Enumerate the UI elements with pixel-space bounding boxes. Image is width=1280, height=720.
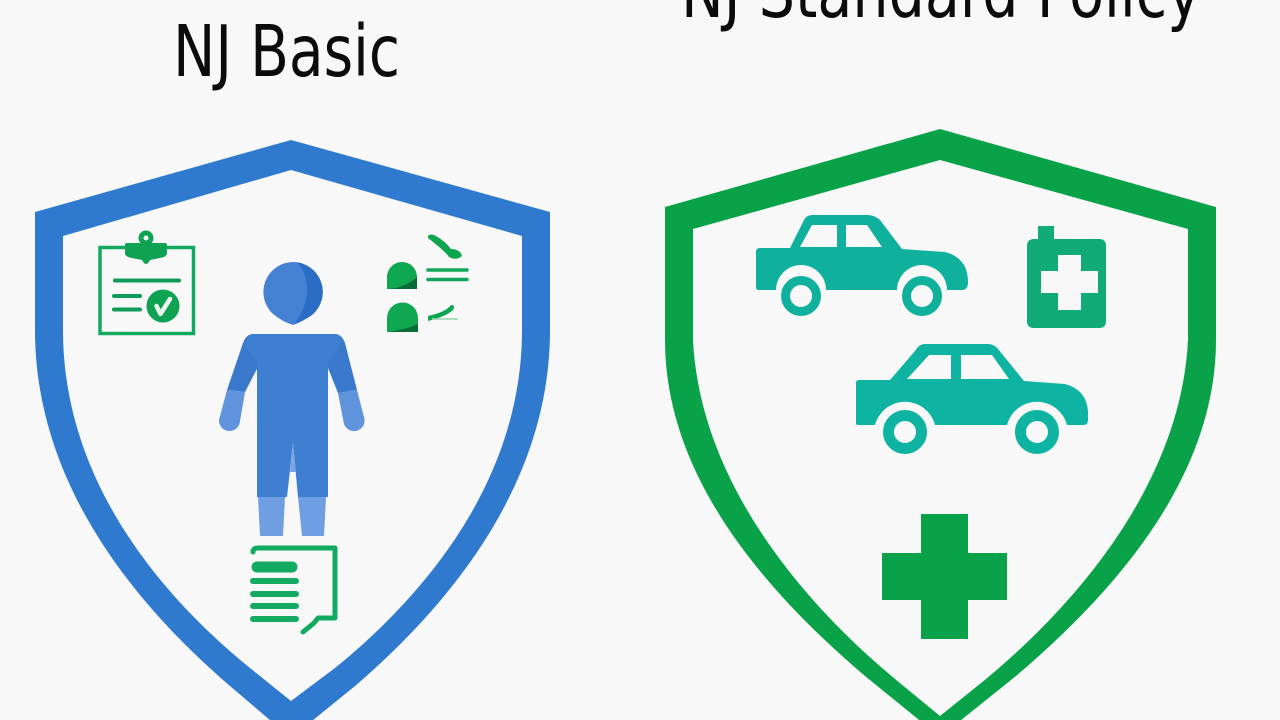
icon: green medical cross — [882, 514, 1007, 639]
wheels — [888, 416, 922, 448]
document outline — [253, 548, 335, 632]
check badge — [146, 290, 180, 322]
person head — [263, 262, 323, 325]
person torso and legs — [245, 334, 342, 497]
icon: clipboard with check — [100, 233, 194, 334]
bullet shading — [387, 277, 418, 332]
panel: blue shield — [35, 140, 550, 720]
document thick line — [257, 562, 292, 572]
icon: first aid bottle — [1027, 226, 1106, 328]
person forearms — [219, 390, 365, 431]
icon: coverage list — [387, 234, 467, 332]
icon: person — [219, 262, 365, 536]
person crotch highlight — [290, 443, 296, 472]
person leg lower sections — [258, 497, 326, 536]
list lines — [428, 270, 467, 280]
document lines — [253, 581, 296, 619]
icon: car top left — [756, 215, 968, 312]
list bullets — [387, 262, 418, 332]
list strokes — [428, 234, 462, 321]
clipboard lines — [114, 280, 179, 310]
heading: NJ Basic: NJ Basic — [173, 10, 400, 93]
person upper arms — [227, 334, 357, 393]
panel: green shield — [665, 129, 1216, 720]
wheels — [786, 280, 816, 312]
icon: car bottom — [856, 344, 1088, 448]
clipboard clip — [125, 243, 167, 264]
icon: document list — [253, 548, 335, 632]
